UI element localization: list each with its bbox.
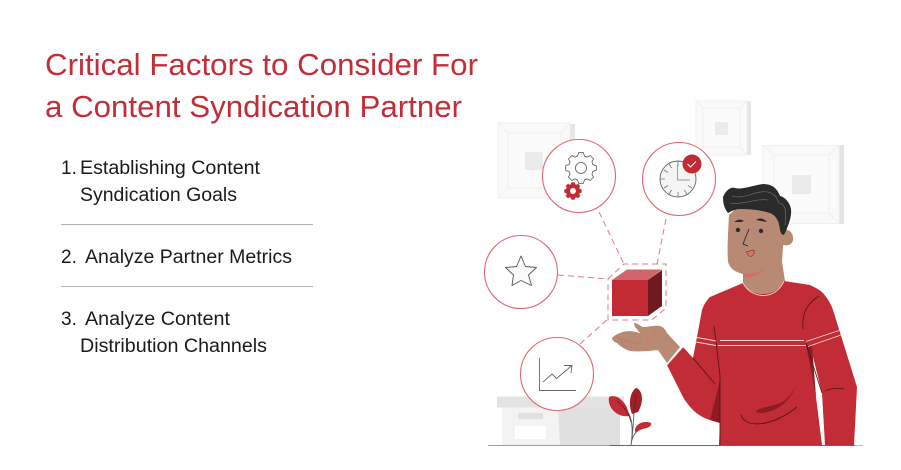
background frame: left — [498, 123, 575, 198]
person: mouth — [746, 250, 754, 256]
storage box — [497, 396, 624, 445]
person: nose — [743, 229, 749, 246]
dashed connectors — [558, 212, 666, 344]
person: sweater white stripes — [667, 281, 841, 365]
list item 2: Analyze Partner Metrics — [85, 247, 292, 268]
list item 3: Distribution Channels — [80, 336, 267, 357]
icon circle: clock with check — [642, 142, 716, 216]
person: hand — [612, 323, 680, 363]
ground line — [488, 444, 863, 446]
title: Critical Factors to Consider For — [45, 47, 478, 82]
person: sweater shadows — [710, 345, 816, 423]
person: eyes and brows — [734, 219, 767, 233]
person: hair — [723, 184, 791, 235]
background frame: top — [696, 101, 751, 155]
person: ear — [782, 230, 793, 245]
person: sweater — [667, 281, 857, 445]
icon circle: growth chart — [520, 338, 594, 410]
icon circle: gears — [542, 140, 616, 212]
list item 1 — [61, 158, 261, 206]
list item 1: Establishing Content — [80, 158, 261, 179]
plant — [609, 388, 651, 445]
background frame: right — [763, 145, 844, 224]
list item 3 — [61, 309, 267, 357]
person: palm lines — [617, 331, 657, 344]
list item 1: Syndication Goals — [80, 185, 237, 206]
person — [612, 184, 857, 445]
list item 2: 2. — [61, 247, 77, 268]
title — [45, 47, 478, 124]
list item 3: 3. — [61, 309, 77, 330]
list item 3: Analyze Content — [85, 309, 231, 330]
cube — [612, 270, 662, 316]
person: sweater fold lines — [693, 296, 844, 445]
person: neck and head — [728, 205, 785, 294]
person: chin shadow — [743, 267, 764, 277]
icon circle: star — [484, 236, 558, 308]
list item 1: 1. — [61, 158, 77, 179]
title: a Content Syndication Partner — [45, 89, 462, 124]
